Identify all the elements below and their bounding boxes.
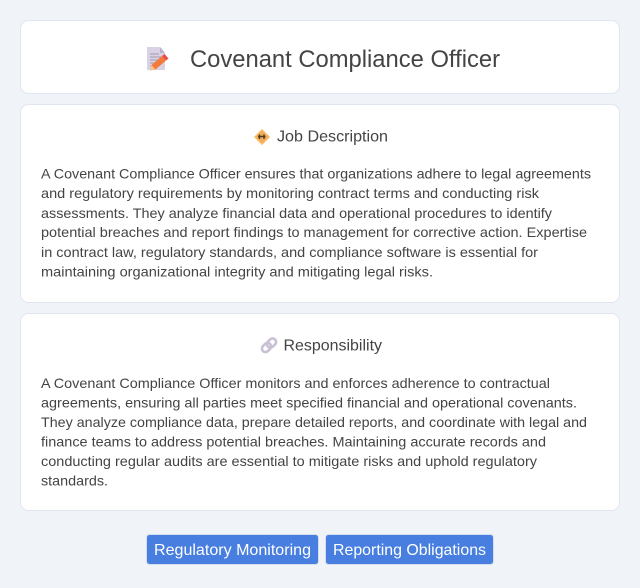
panel: title [20,20,620,94]
text block: responsibility: finance teams to address potential breaches. Maintaining accurate records and [41,434,546,450]
text block: job description: and regulatory requirements by monitoring contract terms and conducting risk [41,185,540,201]
tag: reporting obligations [326,534,494,564]
tag: regulatory monitoring [146,534,318,564]
text block: responsibility [41,375,587,488]
text block: responsibility: standards. [41,472,108,488]
heading: job description: Job Description [277,128,388,146]
text block: job description: potential breaches and report findings to management for corrective action. Expertise [41,224,587,240]
panel: job description [20,104,620,302]
text block: responsibility: conducting regular audits are essential to mitigate risks and uphold regulatory [41,453,537,469]
icon: chain link [260,337,278,354]
text block: responsibility: agreements, ensuring all parties meet specified financial and operational covenants. [41,394,577,410]
text block: job description: A Covenant Compliance Officer ensures that organizations adhere to legal agreements [41,166,591,182]
heading: page title: Covenant Compliance Officer [190,46,500,73]
text block: responsibility: They analyze compliance data, prepare detailed reports, and coordinate with legal and [41,414,587,430]
text block: job description [41,166,591,280]
tag: regulatory monitoring: Regulatory Monitoring [154,542,311,559]
icon: diamond sign [254,130,270,144]
text block: job description: assessments. They analyze financial data and operational procedures to identify [41,205,552,221]
heading: responsibility: Responsibility [284,338,382,354]
tag: reporting obligations: Reporting Obligations [333,542,486,559]
icon: document with pencil [147,47,168,70]
panel: responsibility [20,314,620,510]
text block: job description: maintaining organizational integrity and mitigating legal risks. [41,264,433,280]
text block: responsibility: A Covenant Compliance Officer monitors and enforces adherence to contractual [41,375,550,391]
text block: job description: in contract law, regulatory standards, and compliance software is essential for [41,244,538,260]
